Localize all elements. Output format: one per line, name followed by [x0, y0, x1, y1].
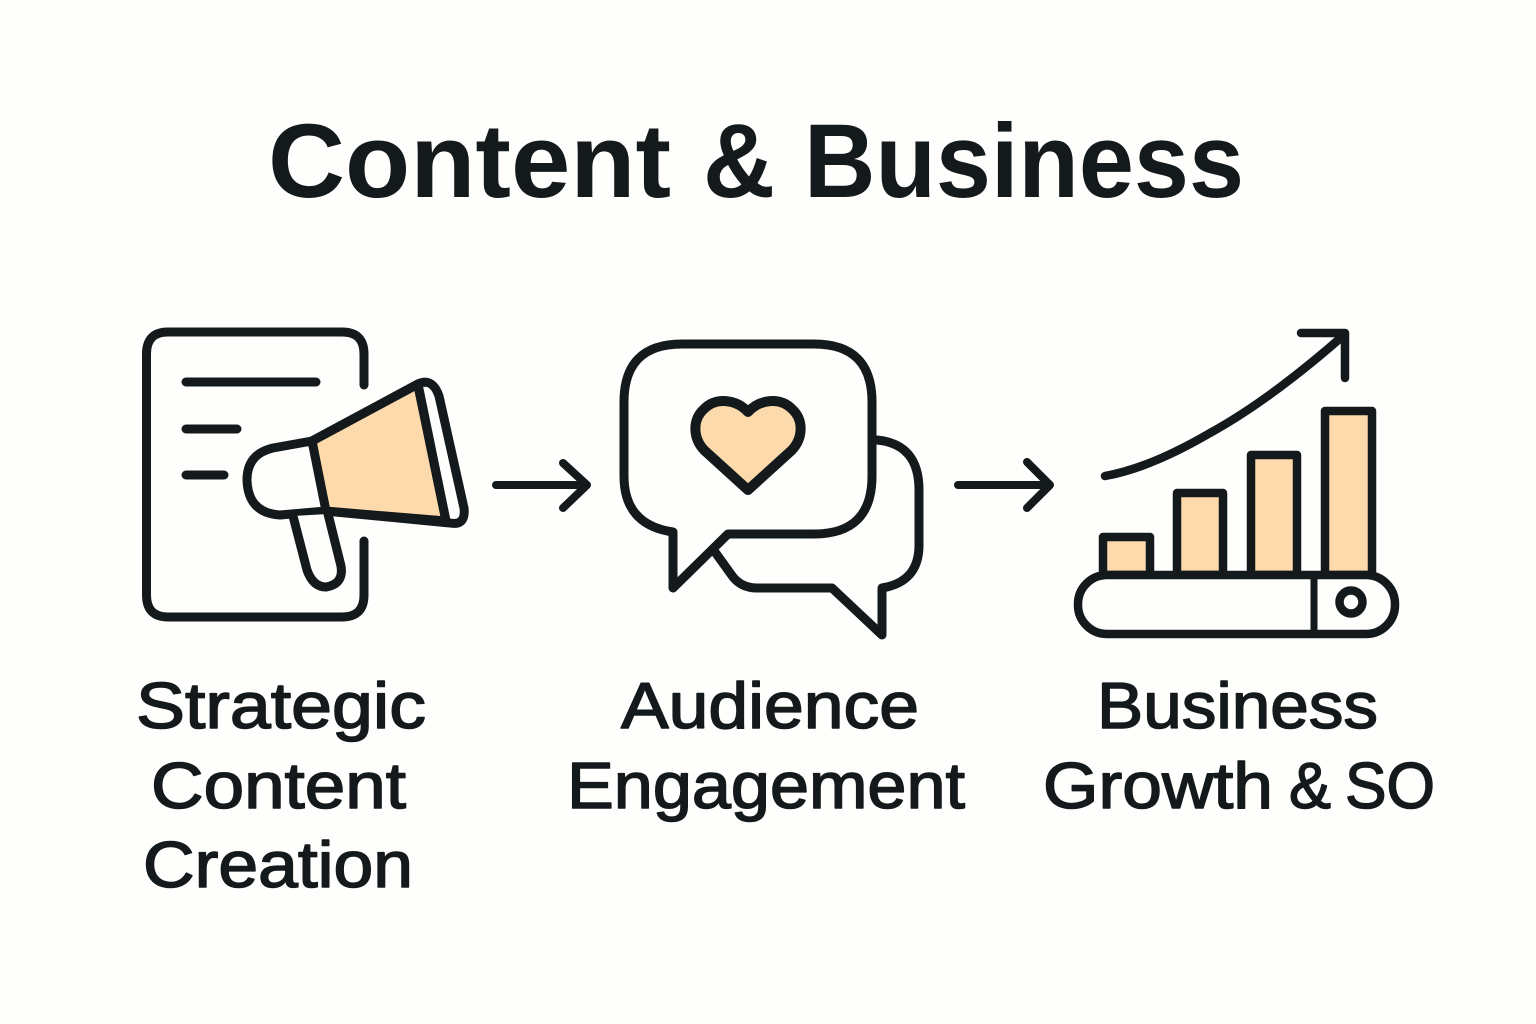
label: strategic content creation: Strategic: [136, 669, 426, 742]
label: business growth and SO: Business: [1097, 669, 1378, 742]
title: [268, 103, 1244, 220]
arrow: engagement to growth: [958, 462, 1050, 508]
label: audience engagement: [567, 669, 965, 822]
label: audience engagement: Audience: [621, 669, 919, 742]
icon: chat bubbles with heart: [624, 344, 919, 635]
arrow: content to engagement: [496, 463, 587, 508]
icon: document with megaphone: [146, 332, 464, 617]
label: business growth and SO: SO: [1345, 749, 1435, 822]
label: business growth and SO: &: [1289, 749, 1331, 822]
label: audience engagement: Engagement: [567, 749, 965, 822]
icon: growth bar chart: [1078, 333, 1395, 634]
title: Content: [268, 103, 671, 220]
label: strategic content creation: Creation: [143, 828, 413, 901]
label: strategic content creation: Content: [151, 749, 406, 822]
label: business growth and SO: [1043, 669, 1435, 822]
title: &: [703, 103, 775, 220]
label: business growth and SO: Growth: [1043, 749, 1273, 822]
title: Business: [804, 103, 1244, 220]
label: strategic content creation: [136, 669, 426, 901]
